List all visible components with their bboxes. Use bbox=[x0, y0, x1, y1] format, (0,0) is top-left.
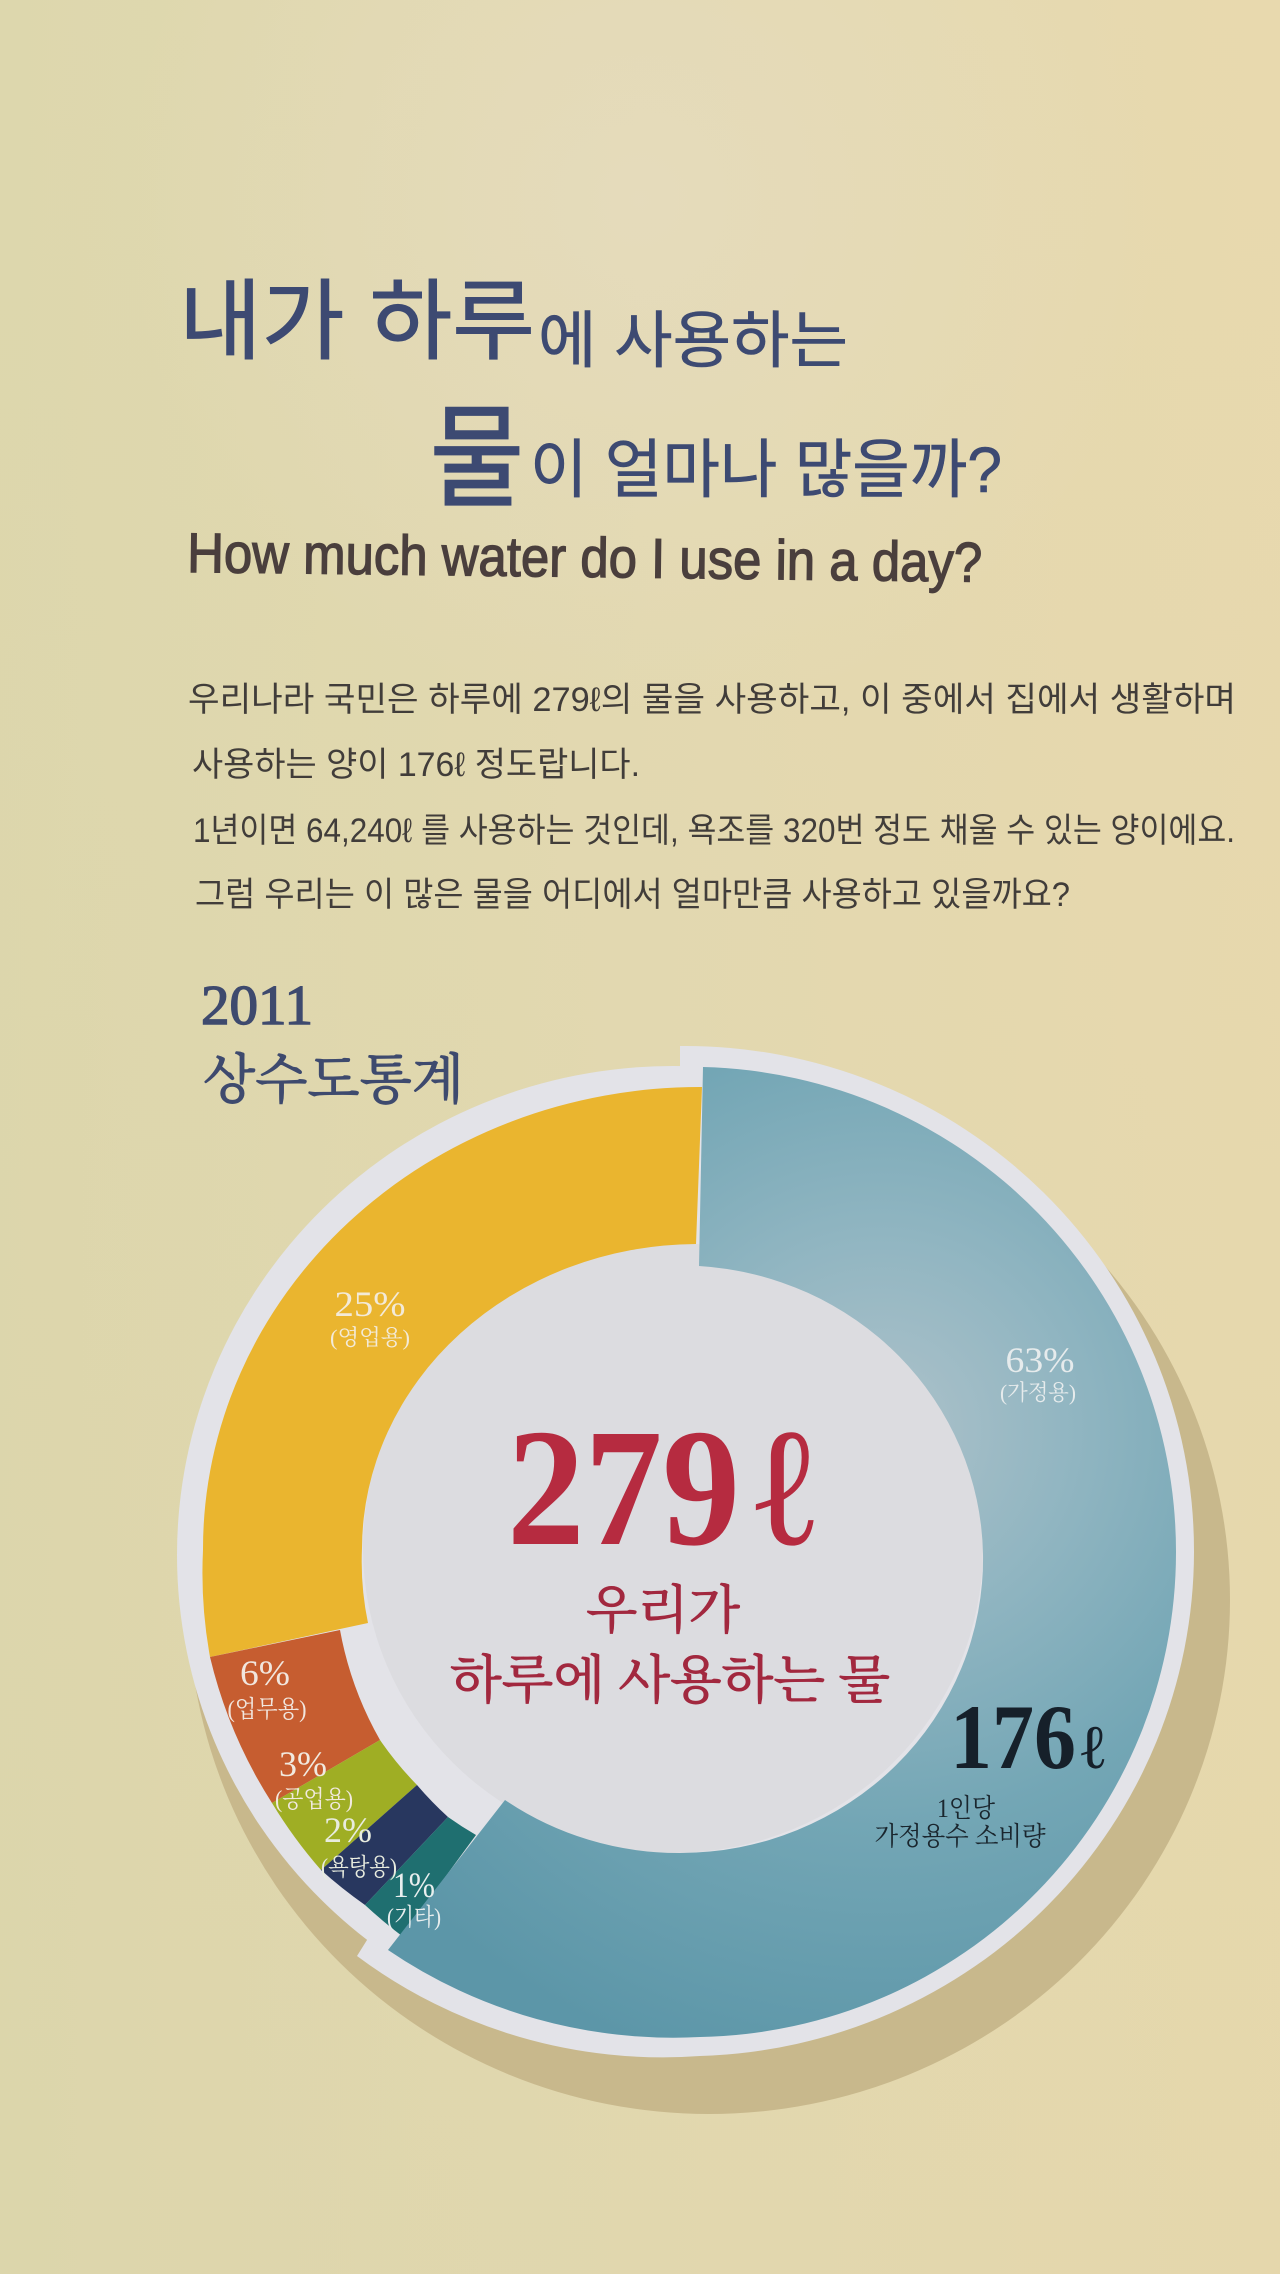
household caption bbox=[874, 1794, 1046, 1851]
household caption: 1인당 bbox=[937, 1794, 995, 1823]
title: 물 bbox=[430, 396, 524, 521]
body text: 우리나라 국민은 하루에 279ℓ의 물을 사용하고, 이 중에서 집에서 생활하며 bbox=[188, 681, 1236, 719]
body text: 사용하는 양이 176ℓ 정도랍니다. bbox=[192, 746, 640, 784]
center value 279 litres: ℓ bbox=[755, 1395, 815, 1581]
label 63%: (가정용) bbox=[1000, 1380, 1076, 1405]
household value 176 litres: ℓ bbox=[1081, 1714, 1105, 1782]
label 1%: (기타) bbox=[387, 1904, 441, 1931]
chart heading: 2011 statistics: 2011 bbox=[201, 975, 313, 1037]
label 3%: (공업용) bbox=[275, 1786, 353, 1813]
label 63%: 63% bbox=[1006, 1340, 1074, 1380]
body text: 그럼 우리는 이 많은 물을 어디에서 얼마만큼 사용하고 있을까요? bbox=[195, 876, 1070, 914]
center caption: 우리가 bbox=[586, 1582, 740, 1640]
center caption: 하루에 사용하는 물 bbox=[450, 1652, 890, 1710]
label 3% bbox=[275, 1744, 353, 1813]
center caption bbox=[450, 1582, 890, 1710]
inner disc bbox=[363, 1243, 983, 1853]
label 25% bbox=[330, 1284, 410, 1350]
white disc backing bbox=[177, 1046, 1194, 2057]
disc shadow bbox=[188, 1086, 1230, 2114]
label 6%: (업무용) bbox=[228, 1696, 306, 1723]
label 6% bbox=[228, 1653, 306, 1723]
segment: commercial 25% bbox=[202, 1087, 702, 1657]
segment: industrial 3% bbox=[272, 1740, 417, 1870]
donut chart bbox=[177, 1046, 1230, 2114]
body text bbox=[188, 681, 1236, 914]
title: 에 사용하는 bbox=[538, 307, 848, 376]
title bbox=[179, 272, 1002, 521]
chart heading: 2011 statistics bbox=[201, 975, 464, 1110]
title: 내가 하루 bbox=[179, 272, 535, 371]
title: 이 얼마나 많을까? bbox=[530, 434, 1002, 506]
label 2% bbox=[321, 1810, 397, 1881]
label 1% bbox=[387, 1865, 441, 1931]
english subtitle: How much water do I use in a day? bbox=[187, 521, 983, 594]
chart heading: 2011 statistics: 상수도통계 bbox=[203, 1050, 464, 1110]
label 25%: 25% bbox=[334, 1284, 406, 1324]
segment: office 6% bbox=[210, 1630, 380, 1803]
label 25%: (영업용) bbox=[330, 1325, 410, 1350]
label 1%: 1% bbox=[393, 1865, 435, 1905]
segment: household 63% bbox=[388, 1067, 1176, 2038]
segment: other 1% bbox=[365, 1817, 476, 1936]
label 2%: (욕탕용) bbox=[321, 1854, 397, 1881]
label 63% bbox=[1000, 1340, 1076, 1405]
segment: bath 2% bbox=[321, 1785, 448, 1905]
household value 176 litres: 176 bbox=[950, 1686, 1076, 1788]
label 6%: 6% bbox=[240, 1653, 290, 1693]
label 3%: 3% bbox=[279, 1744, 327, 1784]
center value 279 litres: 279 bbox=[507, 1395, 740, 1581]
household caption: 가정용수 소비량 bbox=[874, 1822, 1046, 1851]
label 2%: 2% bbox=[324, 1810, 372, 1850]
